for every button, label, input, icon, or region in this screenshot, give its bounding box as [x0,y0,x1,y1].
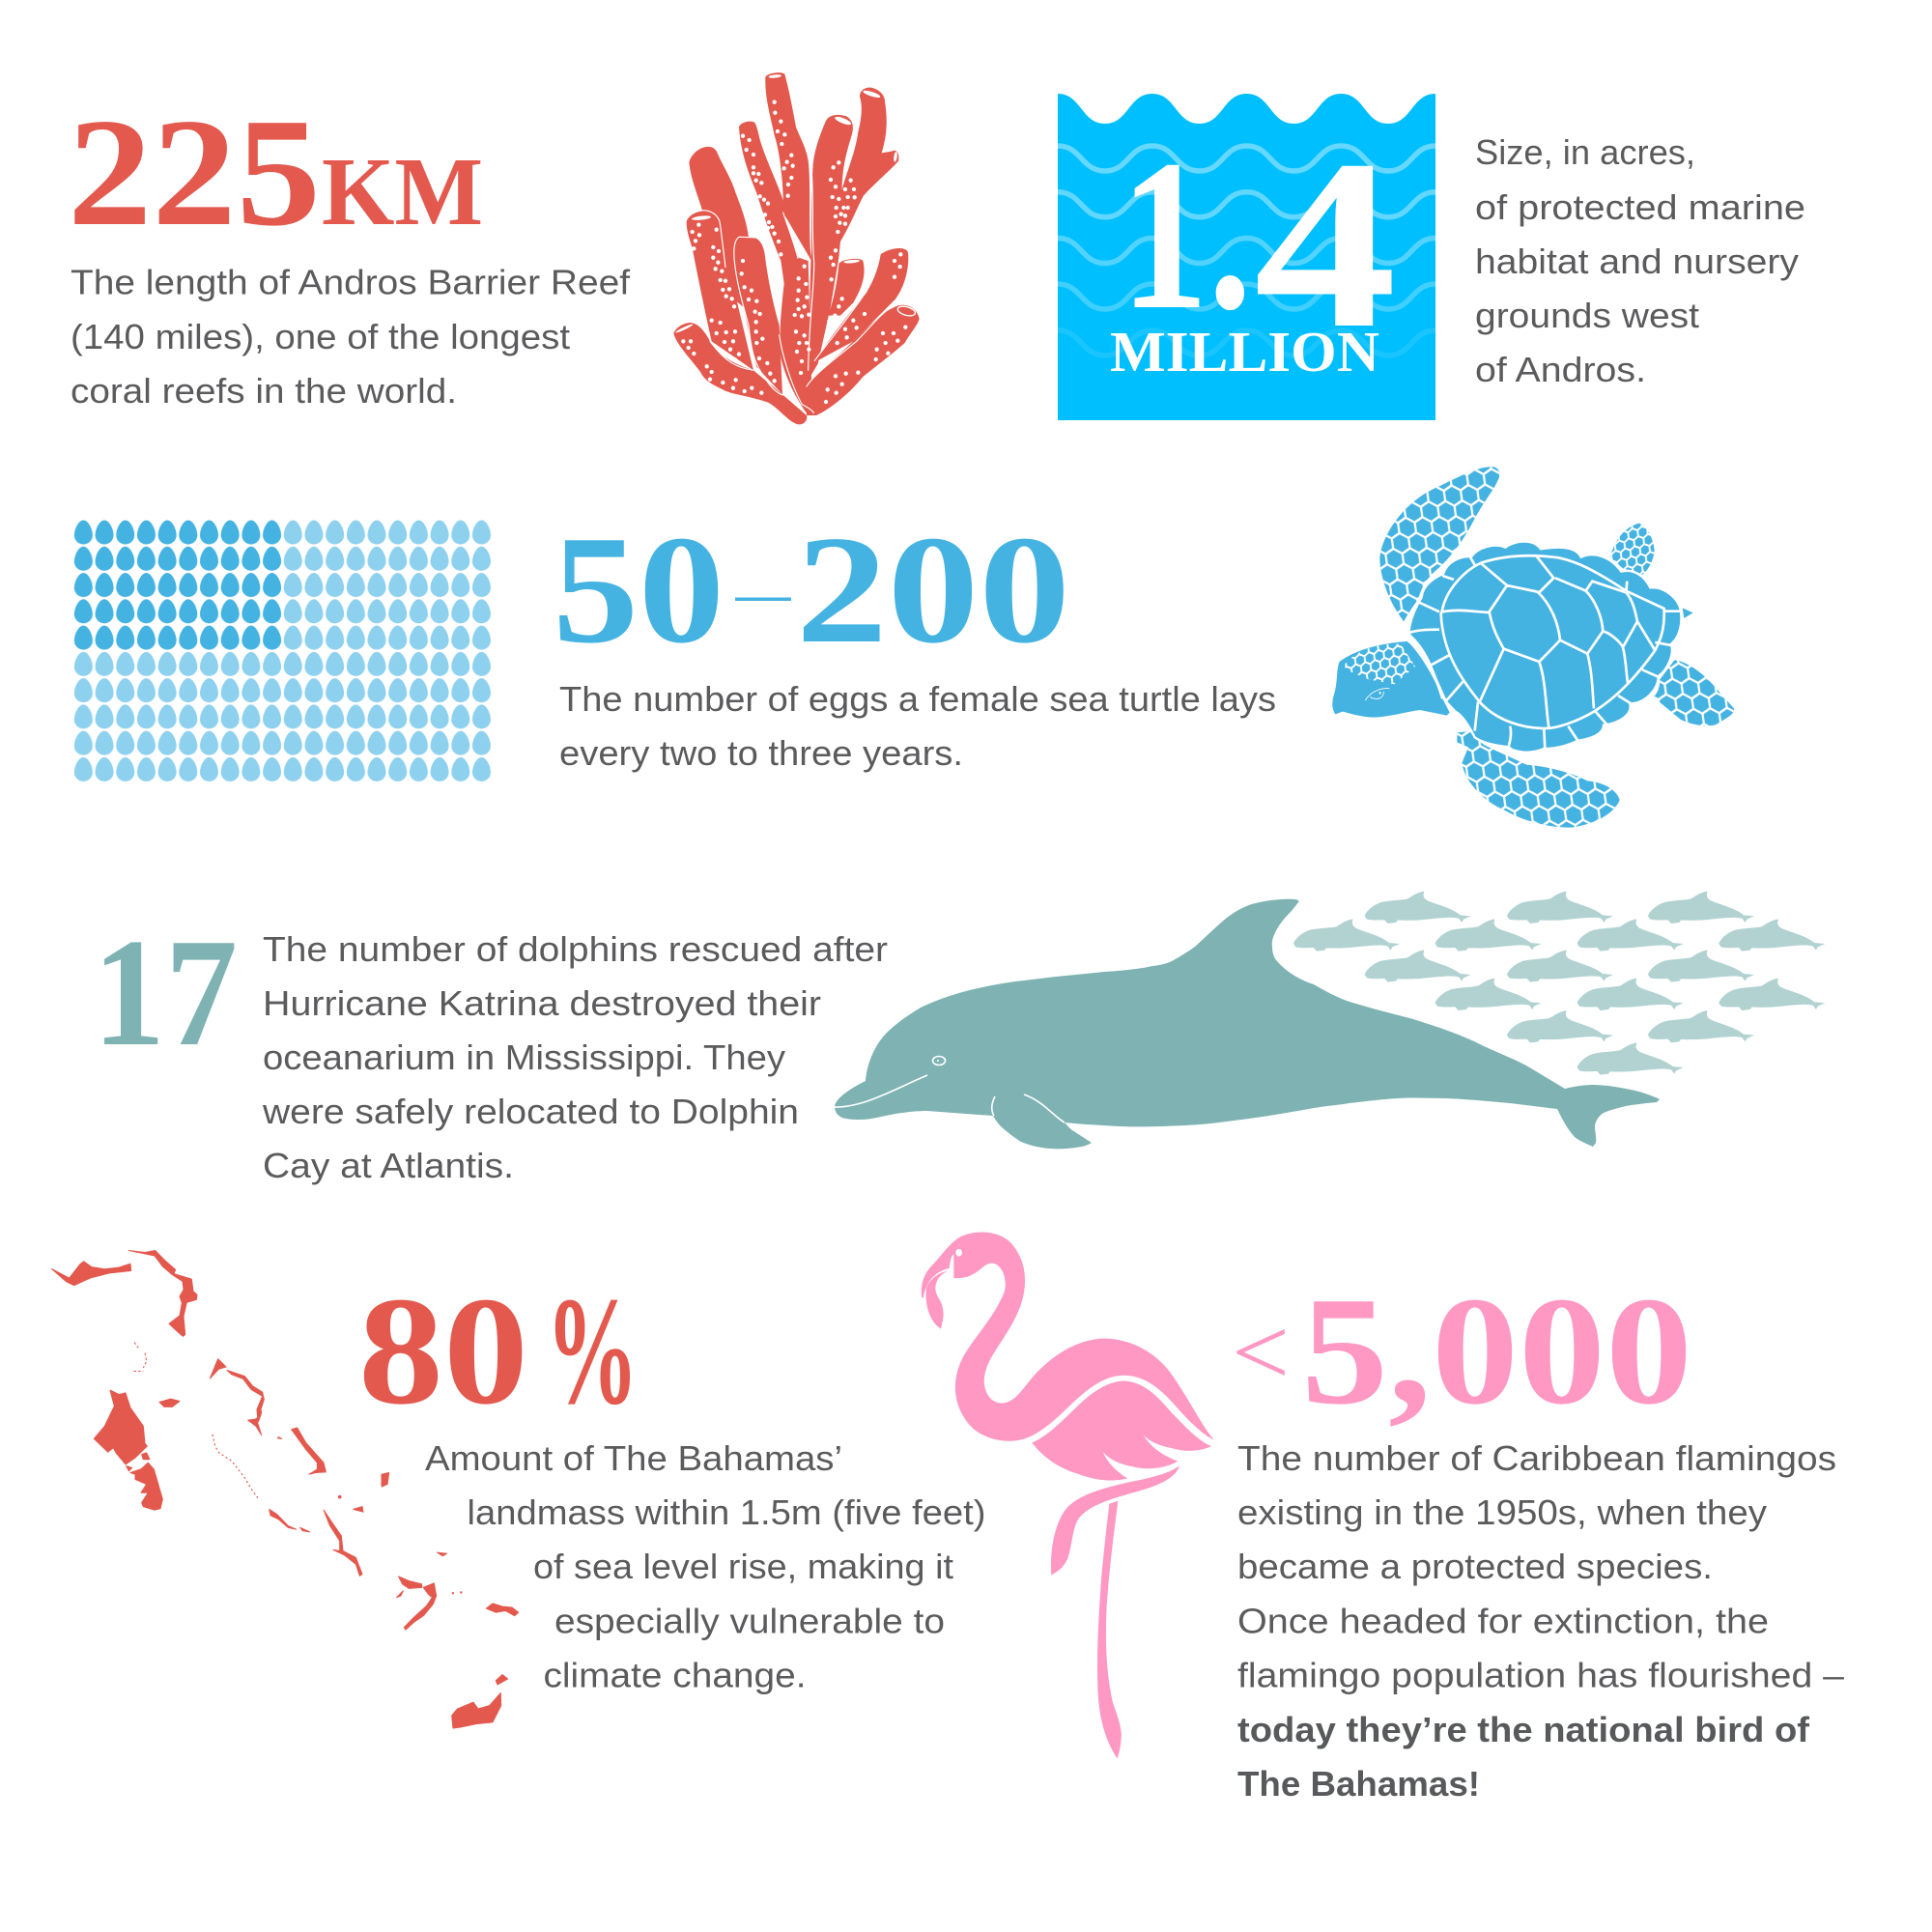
panel: reef length [68,86,631,411]
text: flamingo description: became a protected species. [1237,1547,1713,1586]
text: protected habitat: Size, in acres, [1475,132,1695,172]
panel: flamingos [1232,1264,1844,1804]
text: land mass description: of sea level rise, making it [533,1547,953,1586]
scute lines [1408,555,1681,749]
heading: 225 km [68,86,483,258]
panel: turtle eggs [553,503,1276,773]
chart: egg pictogram [73,520,492,783]
text: eggs description: The number of eggs a female sea turtle lays [559,679,1276,719]
text: reef description: The length of Andros Barrier Reef [71,263,631,301]
text: dolphin description: The number of dolphins rescued after [263,929,888,969]
panel: dolphins [93,906,888,1185]
heading: 80% [358,1264,639,1436]
text: reef description: coral reefs in the world. [71,371,457,411]
text: dolphin description: Hurricane Katrina destroyed their [263,983,821,1023]
big dolphin [835,899,1660,1149]
panel: land mass at risk [358,1264,985,1694]
text: land mass description: climate change. [543,1656,806,1694]
text: reef description [71,263,631,411]
text: protected habitat [1475,132,1805,389]
head and neck [1332,641,1450,718]
heading: 80%: % [546,1264,639,1436]
small dolphin pod [1293,892,1825,1075]
heading: <5,000: < [1232,1298,1290,1406]
heading: 50–200: 200 [796,503,1070,675]
heading: 17: 17 [93,906,238,1078]
icon: flamingo [922,1232,1214,1759]
text: dolphin description: oceanarium in Mississippi. They [263,1037,785,1077]
text: land mass description: landmass within 1.5m (five feet) [468,1492,985,1532]
text: land mass description: especially vulnerable to [554,1602,945,1640]
text: flamingo bold conclusion: today they’re the national bird of [1237,1710,1810,1749]
panel: 1.4 million water block [1053,87,1440,420]
text: flamingo description: Once headed for extinction, the [1237,1602,1769,1640]
icon: coral [673,72,920,424]
icon: sea turtle [1332,464,1739,831]
text: protected habitat: habitat and nursery [1475,242,1799,281]
text: land mass description [425,1438,985,1694]
heading: 1.4 million [1110,110,1397,384]
text: flamingo description: flamingo population has flourished – [1237,1656,1844,1694]
icon: dolphin and pod [835,892,1825,1149]
heading: 225 km: KM [322,137,483,245]
text: land mass description: Amount of The Bahamas’ [425,1438,842,1478]
text: dolphin description: Cay at Atlantis. [263,1146,514,1185]
text: flamingo description [1237,1438,1844,1694]
icon: map of The Bahamas [51,1250,519,1728]
text: eggs description: every two to three years. [559,733,963,773]
text: flamingo bold conclusion: The Bahamas! [1237,1764,1480,1804]
text: protected habitat: of Andros. [1475,350,1646,389]
text: flamingo description: existing in the 1950s, when they [1237,1492,1767,1532]
heading: 80%: 80 [358,1264,528,1436]
text: protected habitat: of protected marine [1475,187,1805,227]
heading: <5,000: 5,000 [1301,1264,1692,1436]
text: eggs description [559,679,1276,773]
heading: 1.4 million: 1. [1121,116,1252,355]
heading: 225 km: 225 [68,86,321,258]
tail [1683,608,1693,618]
heading: 50–200 [553,503,1070,675]
text: protected habitat: grounds west [1475,296,1699,335]
text: flamingo bold conclusion [1237,1710,1810,1804]
text: reef description: (140 miles), one of the longest [71,317,570,356]
shell [1408,542,1681,753]
heading: 50–200: 50 [553,503,724,675]
heading: 1.4 million: 4 [1254,110,1397,379]
text: flamingo description: The number of Caribbean flamingos [1237,1438,1836,1478]
text: dolphin description: were safely relocated to Dolphin [262,1092,799,1131]
heading: 1.4 million: MILLION [1110,320,1379,384]
text: dolphin description [262,929,888,1185]
